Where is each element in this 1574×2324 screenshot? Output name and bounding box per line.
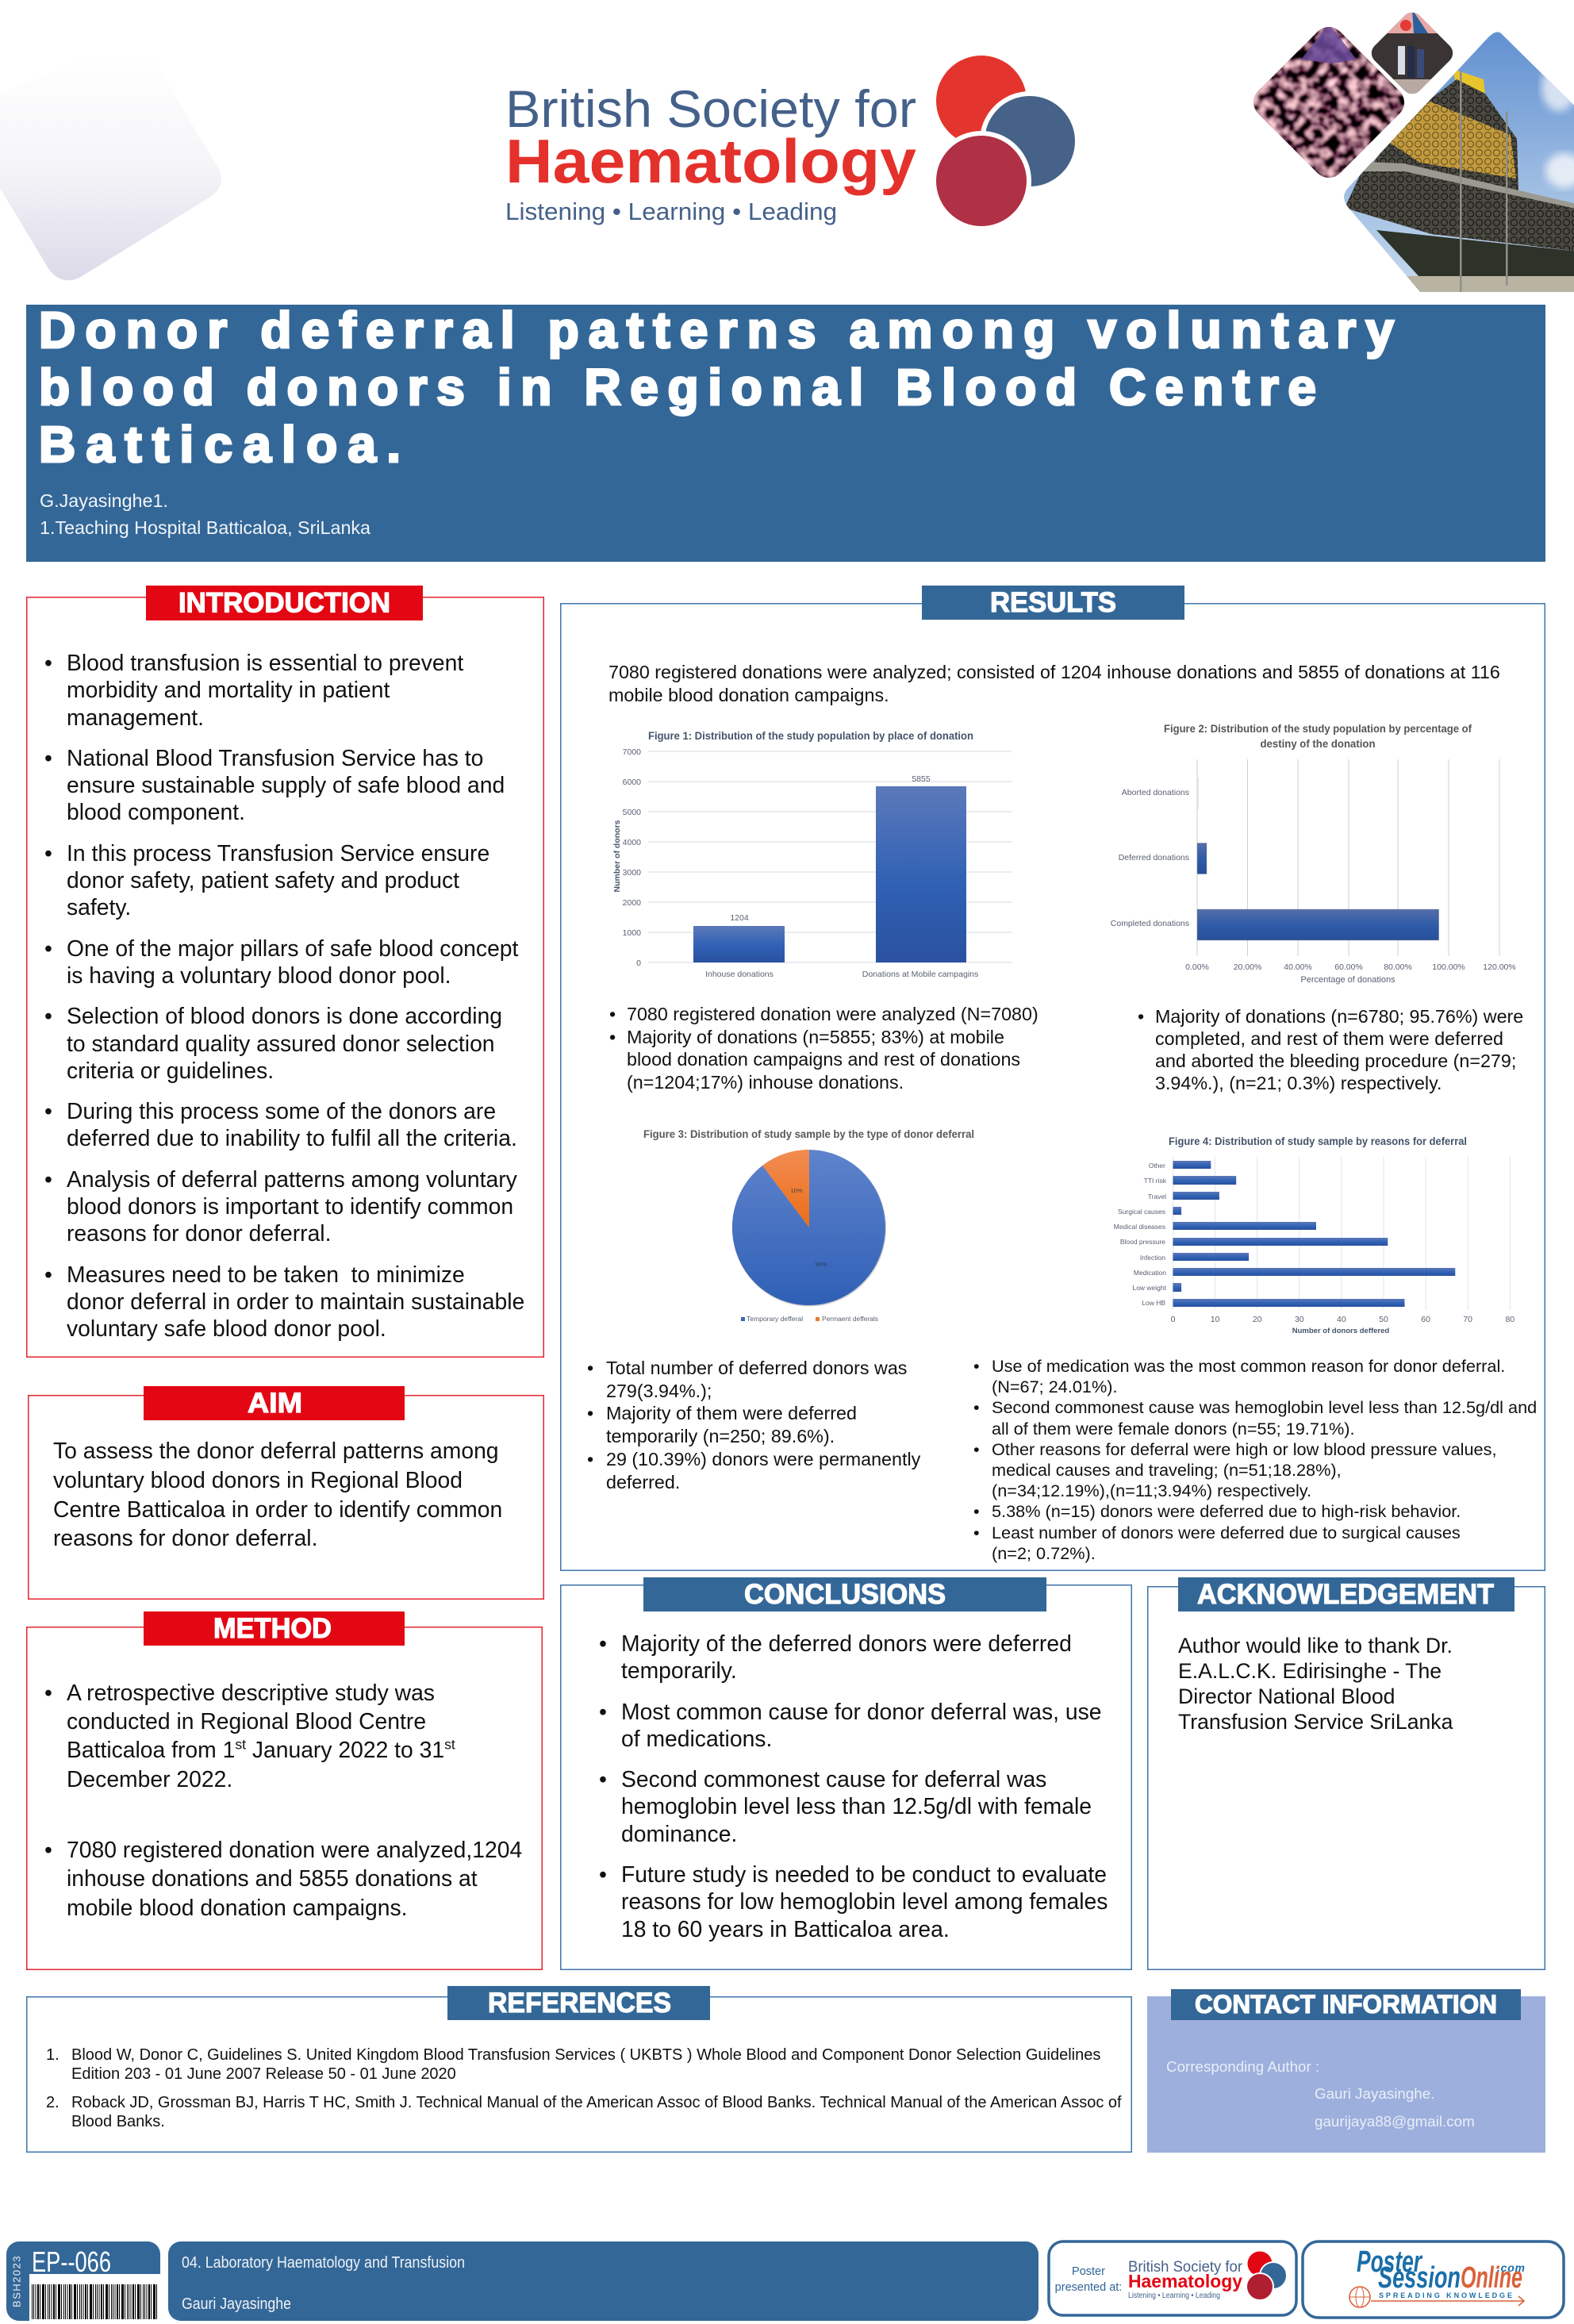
footer: poster ID and barcode (6, 2241, 160, 2321)
figure 3 notes: 279(3.94%.); (606, 1381, 712, 1401)
method bullet 2: • (44, 1837, 52, 1862)
decorative rounded square top left (0, 146, 221, 281)
aim text: Centre Batticaloa in order to identify common (53, 1496, 502, 1522)
conference label: BSH2023 (11, 2255, 22, 2307)
method bullet 1: Batticaloa from 1st January 2022 to 31st (67, 1737, 455, 1762)
conclusions bullet list: hemoglobin level less than 12.5g/dl with female (621, 1793, 1092, 1819)
method bullet 2 (44, 1837, 522, 1920)
panel: references (26, 1996, 1132, 2153)
footer: category and author (168, 2241, 1038, 2321)
chart: figure 1 bar chart: 5000 (623, 808, 641, 817)
chart: figure 4 horizontal bar chart: Blood pressure (1120, 1238, 1165, 1246)
method bullet 1 (44, 1679, 455, 1792)
introduction bullet list: • (44, 1262, 52, 1287)
chart: figure 4 horizontal bar chart: Medical diseases (1114, 1223, 1165, 1231)
method bullet 1: conducted in Regional Blood Centre (67, 1708, 426, 1734)
chart: figure 3 pie chart (635, 1119, 1000, 1341)
reference 2: Roback JD, Grossman BJ, Harris T HC, Smith J. Technical Manual of the American Assoc of Blood Banks. Technical Manual of the American Assoc of (71, 2094, 1122, 2111)
conclusions bullet list (599, 1630, 1108, 1956)
introduction bullet list: • (44, 1166, 52, 1192)
conclusions bullet list: Future study is needed to be conduct to evaluate (621, 1861, 1107, 1887)
chart: figure 4 horizontal bar chart: Infection (1140, 1254, 1165, 1262)
figure 1 notes: blood donation campaigns and rest of donations (627, 1049, 1020, 1070)
conclusions bullet list: 18 to 60 years in Batticaloa area. (621, 1916, 950, 1942)
figure 4 notes: Use of medication was the most common reason for donor deferral. (992, 1356, 1505, 1376)
conclusions bullet list: Majority of the deferred donors were deferred (621, 1631, 1072, 1656)
conclusions bullet list: • (599, 1631, 607, 1656)
chart: figure 1 bar chart: Donations at Mobile campagins (862, 970, 978, 979)
footer: presented at logo: Haematology (1128, 2271, 1242, 2291)
figure 1 notes: 7080 registered donation were analyzed (N=7080) (627, 1004, 1038, 1024)
contact details: Gauri Jayasinghe. (1315, 2085, 1434, 2102)
introduction bullet list: Blood transfusion is essential to prevent (67, 650, 463, 675)
heading: contact information: CONTACT INFORMATION (1195, 1990, 1497, 2019)
conclusions bullet list: • (599, 1699, 607, 1724)
chart: figure 2 horizontal bar chart (1111, 722, 1516, 985)
figure 2 notes: completed, and rest of them were deferred (1155, 1028, 1503, 1049)
title: Batticaloa. (39, 416, 401, 473)
figure 1 notes (609, 1004, 1038, 1093)
heading: method (144, 1611, 405, 1646)
figure 3 notes: 29 (10.39%) donors were permanently (606, 1449, 920, 1469)
figure 2 notes: 3.94%.), (n=21; 0.3%) respectively. (1155, 1073, 1442, 1093)
figure 3 notes: Majority of them were deferred (606, 1403, 857, 1423)
figure 2 notes: and aborted the bleeding procedure (n=279; (1155, 1051, 1516, 1071)
heading: references (447, 1986, 710, 2020)
introduction bullet list: deferred due to inability to fulfil all the criteria. (67, 1125, 517, 1150)
results intro text (608, 662, 1500, 705)
chart: figure 4 horizontal bar chart: 50 (1379, 1315, 1388, 1324)
chart: figure 4 horizontal bar chart: Figure 4: Distribution of study sample by reasons for deferral (1169, 1135, 1467, 1147)
chart: figure 3 pie chart: 10% (790, 1187, 803, 1194)
conclusions bullet list: • (599, 1766, 607, 1792)
chart: figure 1 bar chart (612, 729, 1012, 979)
contact details (1147, 2058, 1545, 2145)
footer: Poster Session Online logo: Session (1378, 2261, 1461, 2295)
heading: conclusions (643, 1577, 1046, 1611)
introduction bullet list: blood component. (67, 799, 245, 824)
chart: figure 2 horizontal bar chart: Deferred donations (1119, 853, 1189, 862)
introduction bullet list (44, 650, 524, 1341)
figure 4 notes (973, 1356, 1537, 1564)
chart: figure 2 horizontal bar chart: 40.00% (1284, 962, 1312, 972)
results intro text: 7080 registered donations were analyzed; consisted of 1204 inhouse donations and 5855 of donations at 116 (608, 662, 1500, 682)
method bullet 1: • (44, 1679, 52, 1704)
title (39, 302, 1395, 473)
chart: figure 2 horizontal bar chart: destiny of the donation (1260, 737, 1376, 750)
acknowledgement text: E.A.L.C.K. Edirisinghe - The (1178, 1659, 1442, 1683)
chart: figure 2 horizontal bar chart: 0.00% (1185, 962, 1209, 972)
figure 1 notes: (n=1204;17%) inhouse donations. (627, 1072, 904, 1093)
chart: figure 1 bar chart: Inhouse donations (705, 970, 774, 979)
session code: EP--066 (32, 2245, 111, 2278)
footer: presented at logo: British Society for (1128, 2259, 1243, 2276)
method bullet 1: December 2022. (67, 1766, 232, 1792)
chart: figure 2 horizontal bar chart: 20.00% (1234, 962, 1261, 972)
chart: figure 1 bar chart: 7000 (623, 747, 641, 757)
figure 4 notes: 5.38% (n=15) donors were deferred due to high-risk behavior. (992, 1501, 1461, 1521)
reference 1: Blood W, Donor C, Guidelines S. United Kingdom Blood Transfusion Services ( UKBTS ) Whole Blood and Component Donor Selection Guidelines (71, 2046, 1100, 2063)
figure 3 notes: temporarily (n=250; 89.6%). (606, 1426, 835, 1446)
introduction bullet list: management. (67, 705, 204, 730)
method bullet 1: A retrospective descriptive study was (67, 1679, 435, 1704)
authors and affiliation (40, 490, 370, 538)
chart: figure 2 horizontal bar chart: Aborted donations (1122, 788, 1189, 797)
introduction bullet list: reasons for donor deferral. (67, 1220, 331, 1246)
acknowledgement text: Director National Blood (1178, 1684, 1395, 1708)
chart: figure 4 horizontal bar chart: Number of donors deffered (1292, 1327, 1389, 1335)
introduction bullet list: criteria or guidelines. (67, 1058, 274, 1083)
panel: aim (28, 1395, 544, 1600)
introduction bullet list: voluntary safe blood donor pool. (67, 1316, 386, 1341)
heading: aim (144, 1386, 405, 1420)
introduction bullet list: donor deferral in order to maintain sustainable (67, 1289, 524, 1314)
acknowledgement text (1178, 1633, 1453, 1734)
reference 1 (46, 2046, 1100, 2084)
authors and affiliation: 1.Teaching Hospital Batticaloa, SriLanka (40, 517, 370, 538)
chart: figure 4 horizontal bar chart: 80 (1505, 1315, 1514, 1324)
figure 3 notes (587, 1357, 920, 1493)
figure 3 notes: • (587, 1403, 593, 1423)
chart: figure 3 pie chart: Permaent defferals (822, 1316, 878, 1323)
chart: figure 1 bar chart: 4000 (623, 838, 641, 847)
figure 2 notes (1138, 1006, 1523, 1093)
introduction bullet list: Measures need to be taken to minimize (67, 1262, 465, 1287)
chart: figure 4 horizontal bar chart: 20 (1253, 1315, 1262, 1324)
method bullet 2: 7080 registered donation were analyzed,1204 (67, 1837, 522, 1862)
logo: British Society for Haematology: Listening • Learning • Leading (505, 198, 837, 225)
introduction bullet list: donor safety, patient safety and product (67, 867, 459, 893)
introduction bullet list: • (44, 1098, 52, 1124)
logo: British Society for Haematology: British Society for (505, 79, 916, 138)
figure 4 notes: Second commonest cause was hemoglobin level less than 12.5g/dl and (992, 1397, 1537, 1417)
conclusions bullet list: temporarily. (621, 1658, 737, 1683)
footer: Poster Session Online logo (1300, 2239, 1566, 2321)
conclusions bullet list: Most common cause for donor deferral was, use (621, 1699, 1102, 1724)
figure 4 notes: (n=34;12.19%),(n=11;3.94%) respectively. (992, 1481, 1311, 1500)
introduction bullet list: • (44, 650, 52, 675)
contact details: Corresponding Author : (1166, 2058, 1319, 2075)
introduction bullet list: safety. (67, 894, 131, 920)
chart: figure 1 bar chart: Number of donors (612, 820, 622, 892)
heading: aim: AIM (248, 1388, 302, 1419)
chart: figure 1 bar chart: Figure 1: Distribution of the study population by place of donation (648, 729, 973, 742)
chart: figure 2 horizontal bar chart: Percentage of donations (1300, 975, 1395, 985)
logo: British Society for Haematology: Haematology (505, 126, 916, 196)
figure 4 notes: • (973, 1356, 980, 1376)
reference 1: 1. (46, 2046, 60, 2063)
introduction bullet list: blood donors is important to identify common (67, 1193, 513, 1219)
chart: figure 1 bar chart: 2000 (623, 898, 641, 908)
heading: introduction: INTRODUCTION (179, 587, 390, 619)
chart: figure 4 horizontal bar chart: 60 (1421, 1315, 1430, 1324)
figure 3 notes: Total number of deferred donors was (606, 1358, 907, 1378)
contact details: gaurijaya88@gmail.com (1315, 2113, 1475, 2130)
panel: method (26, 1627, 543, 1970)
figure 4 notes: Least number of donors were deferred due to surgical causes (992, 1523, 1461, 1542)
footer: presented at logo (1047, 2239, 1300, 2318)
chart: figure 4 horizontal bar chart: 30 (1295, 1315, 1304, 1324)
footer: presented at logo: presented at: (1055, 2281, 1122, 2294)
introduction bullet list: In this process Transfusion Service ensure (67, 840, 489, 866)
logo: British Society for Haematology (505, 56, 1075, 226)
introduction bullet list: One of the major pillars of safe blood concept (67, 935, 518, 961)
footer: Poster Session Online logo: Poster (1357, 2245, 1423, 2279)
chart: figure 1 bar chart: 0 (636, 958, 641, 968)
conclusions bullet list: • (599, 1861, 607, 1887)
aim text (53, 1438, 502, 1550)
results intro text: mobile blood donation campaigns. (608, 685, 889, 705)
figure 1 notes: • (609, 1004, 616, 1024)
aim text: voluntary blood donors in Regional Blood (53, 1467, 463, 1492)
introduction bullet list: During this process some of the donors are (67, 1098, 496, 1124)
chart: figure 2 horizontal bar chart: 120.00% (1483, 962, 1516, 972)
figure 1 notes: • (609, 1027, 616, 1047)
chart: figure 4 horizontal bar chart: 0 (1171, 1315, 1176, 1324)
chart: figure 4 horizontal bar chart (1111, 1127, 1531, 1341)
footer: presented at logo: Listening • Learning • Leading (1128, 2291, 1220, 2300)
acknowledgement text: Author would like to thank Dr. (1178, 1634, 1453, 1658)
conclusions bullet list: Second commonest cause for deferral was (621, 1766, 1046, 1792)
figure 4 notes: • (973, 1523, 980, 1542)
footer: Poster Session Online logo: Online (1461, 2261, 1522, 2295)
introduction bullet list: to standard quality assured donor selection (67, 1031, 495, 1056)
figure 3 notes: • (587, 1358, 593, 1378)
chart: figure 4 horizontal bar chart: Low weight (1132, 1284, 1167, 1292)
introduction bullet list: is having a voluntary blood donor pool. (67, 962, 451, 988)
figure 2 notes: Majority of donations (n=6780; 95.76%) were (1155, 1006, 1523, 1027)
barcode (29, 2274, 160, 2321)
figure 4 notes: all of them were female donors (n=55; 19.71%). (992, 1419, 1355, 1439)
introduction bullet list: • (44, 935, 52, 961)
footer: presented at logo: Poster (1072, 2265, 1105, 2278)
chart: figure 4 horizontal bar chart: Other (1149, 1162, 1165, 1170)
panel: results (560, 603, 1545, 1571)
chart: figure 3 pie chart: Figure 3: Distribution of study sample by the type of donor deferral (643, 1127, 974, 1140)
introduction bullet list: • (44, 840, 52, 866)
panel: acknowledgement (1147, 1586, 1545, 1970)
reference 1: Edition 203 - 01 June 2007 Release 50 - 01 June 2020 (71, 2065, 456, 2082)
chart: figure 4 horizontal bar chart: 10 (1211, 1315, 1220, 1324)
figure 2 notes: • (1138, 1006, 1144, 1027)
authors and affiliation: G.Jayasinghe1. (40, 490, 168, 511)
chart: figure 3 pie chart: 90% (815, 1261, 827, 1268)
introduction bullet list: morbidity and mortality in patient (67, 677, 390, 702)
heading: method: METHOD (213, 1613, 332, 1644)
heading: results: RESULTS (990, 587, 1116, 618)
panel: conclusions (560, 1585, 1132, 1970)
introduction bullet list: Analysis of deferral patterns among voluntary (67, 1166, 517, 1192)
introduction bullet list: ensure sustainable supply of safe blood and (67, 772, 505, 797)
method bullet 2: inhouse donations and 5855 donations at (67, 1865, 478, 1891)
panel: introduction (26, 597, 544, 1358)
chart: figure 1 bar chart: 1204 (730, 913, 749, 923)
reference 2: Blood Banks. (71, 2113, 165, 2130)
title: Donor deferral patterns among voluntary (39, 302, 1394, 359)
footer: category and author: Gauri Jayasinghe (182, 2295, 291, 2313)
chart: figure 4 horizontal bar chart: TTI risk (1144, 1177, 1167, 1185)
conclusions bullet list: of medications. (621, 1726, 772, 1751)
chart: figure 4 horizontal bar chart: Travel (1148, 1193, 1166, 1200)
footer: category and author: 04. Laboratory Haematology and Transfusion (182, 2254, 465, 2272)
chart: figure 2 horizontal bar chart: 100.00% (1432, 962, 1465, 972)
introduction bullet list: Selection of blood donors is done according (67, 1003, 502, 1028)
figure 4 notes: • (973, 1439, 980, 1459)
figure 4 notes: • (973, 1397, 980, 1417)
chart: figure 1 bar chart: 3000 (623, 868, 641, 878)
figure 4 notes: Other reasons for deferral were high or low blood pressure values, (992, 1439, 1496, 1459)
chart: figure 4 horizontal bar chart: 70 (1463, 1315, 1472, 1324)
chart: figure 4 horizontal bar chart: 40 (1337, 1315, 1346, 1324)
heading: references: REFERENCES (488, 1988, 671, 2019)
chart: figure 2 horizontal bar chart: 80.00% (1384, 962, 1412, 972)
title banner (26, 305, 1545, 562)
figure 4 notes: (n=2; 0.72%). (992, 1543, 1096, 1563)
chart: figure 4 horizontal bar chart: Surgical causes (1118, 1208, 1165, 1216)
introduction bullet list: National Blood Transfusion Service has to (67, 745, 483, 770)
conclusions bullet list: dominance. (621, 1821, 737, 1846)
reference 2: 2. (46, 2094, 60, 2111)
footer: Poster Session Online logo: SPREADING KNOWLEDGE (1379, 2291, 1512, 2299)
heading: acknowledgement: ACKNOWLEDGEMENT (1197, 1579, 1494, 1610)
heading: introduction (146, 586, 423, 620)
chart: figure 2 horizontal bar chart: 60.00% (1334, 962, 1363, 972)
reference 2 (46, 2093, 1122, 2131)
figure 3 notes: • (587, 1449, 593, 1469)
figure 3 notes: deferred. (606, 1472, 680, 1492)
figure 4 notes: medical causes and traveling; (n=51;18.28%), (992, 1460, 1342, 1480)
aim text: reasons for donor deferral. (53, 1525, 317, 1550)
introduction bullet list: • (44, 745, 52, 770)
chart: figure 4 horizontal bar chart: Medication (1134, 1269, 1166, 1277)
chart: figure 1 bar chart: 6000 (623, 778, 641, 787)
chart: figure 2 horizontal bar chart: Figure 2: Distribution of the study population by percentage of (1164, 722, 1472, 735)
figure 4 notes: • (973, 1501, 980, 1521)
heading: results (922, 586, 1184, 620)
chart: figure 2 horizontal bar chart: Completed donations (1111, 919, 1189, 928)
panel: contact information (1147, 1996, 1545, 2153)
chart: figure 4 horizontal bar chart: Low HB (1142, 1299, 1165, 1307)
chart: figure 1 bar chart: 5855 (912, 774, 931, 784)
chart: figure 1 bar chart: 1000 (623, 928, 641, 938)
acknowledgement text: Transfusion Service SriLanka (1178, 1710, 1453, 1734)
conclusions bullet list: reasons for low hemoglobin level among females (621, 1888, 1108, 1914)
figure 1 notes: Majority of donations (n=5855; 83%) at mobile (627, 1027, 1004, 1047)
method bullet 2: mobile blood donation campaigns. (67, 1895, 407, 1920)
footer: Poster Session Online logo: .com (1497, 2261, 1525, 2274)
title: blood donors in Regional Blood Centre (39, 359, 1316, 416)
photo collage diamonds (1253, 13, 1574, 292)
aim text: To assess the donor deferral patterns among (53, 1438, 499, 1463)
chart: figure 3 pie chart: Temporary defferal (747, 1316, 803, 1323)
heading: conclusions: CONCLUSIONS (744, 1579, 946, 1610)
figure 4 notes: (N=67; 24.01%). (992, 1377, 1118, 1396)
introduction bullet list: • (44, 1003, 52, 1028)
